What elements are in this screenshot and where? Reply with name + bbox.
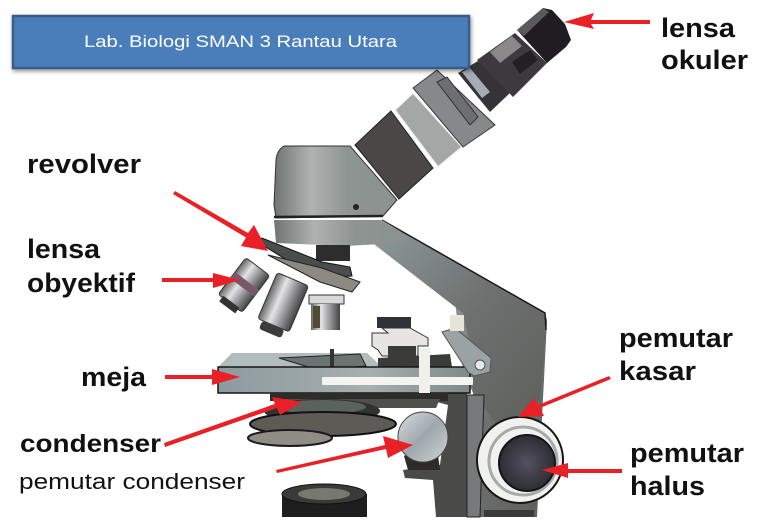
stage top: [218, 353, 470, 372]
microscope head: [274, 146, 397, 218]
lower illuminator: [282, 484, 367, 517]
stage lever: [442, 328, 491, 376]
nosepiece collar: [274, 220, 408, 246]
objective lens 3: [309, 295, 344, 330]
label: meja: meja: [81, 362, 147, 392]
eyepiece collar: [413, 70, 495, 147]
microscope illustration: [215, 8, 571, 517]
arrow: pemutar kasar: [518, 376, 611, 417]
arrow: revolver: [173, 191, 268, 251]
label: lensa: lensa: [27, 234, 101, 264]
condenser: [248, 393, 448, 446]
eyepiece barrel: [477, 33, 547, 97]
arrow: condenser: [164, 397, 302, 447]
prism housing dark: [355, 111, 433, 199]
coarse focus knob: [477, 417, 563, 503]
label: revolver: revolver: [27, 149, 142, 179]
banner title text: Lab. Biologi SMAN 3 Rantau Utara: [84, 32, 398, 51]
label: kasar: kasar: [619, 356, 697, 386]
curved arm: [375, 220, 547, 430]
column front dark panel: [403, 393, 468, 517]
arrow: lensa obyektif: [162, 273, 240, 288]
condenser knob: [398, 412, 448, 470]
prism housing light: [395, 93, 462, 167]
knurled ring: [458, 61, 513, 112]
arrow: pemutar condenser: [276, 436, 413, 473]
arrow: pemutar halus: [542, 463, 622, 478]
objective lens 1: [215, 258, 270, 316]
fine focus knob: [499, 435, 555, 491]
label: halus: halus: [630, 471, 705, 501]
label: pemutar condenser: pemutar condenser: [19, 469, 245, 494]
revolver plate: [256, 238, 352, 277]
label: lensa okuler: lensa: [661, 13, 736, 43]
base pillar: [450, 258, 547, 517]
label: obyektif: obyektif: [27, 268, 136, 298]
title banner: [13, 16, 469, 68]
stage sliding strip: [322, 377, 473, 385]
label: pemutar (kasar): pemutar: [619, 323, 734, 353]
label: condenser: condenser: [20, 430, 161, 458]
objective lens 2: [254, 273, 309, 340]
stage front: [218, 367, 470, 393]
eyepiece cap: [517, 8, 571, 63]
arrow: meja: [165, 369, 240, 385]
arrow: lensa okuler: [564, 13, 650, 29]
label: pemutar (halus): pemutar: [630, 438, 745, 468]
slide holder clip: [372, 317, 428, 360]
label: okuler: okuler: [661, 45, 749, 75]
